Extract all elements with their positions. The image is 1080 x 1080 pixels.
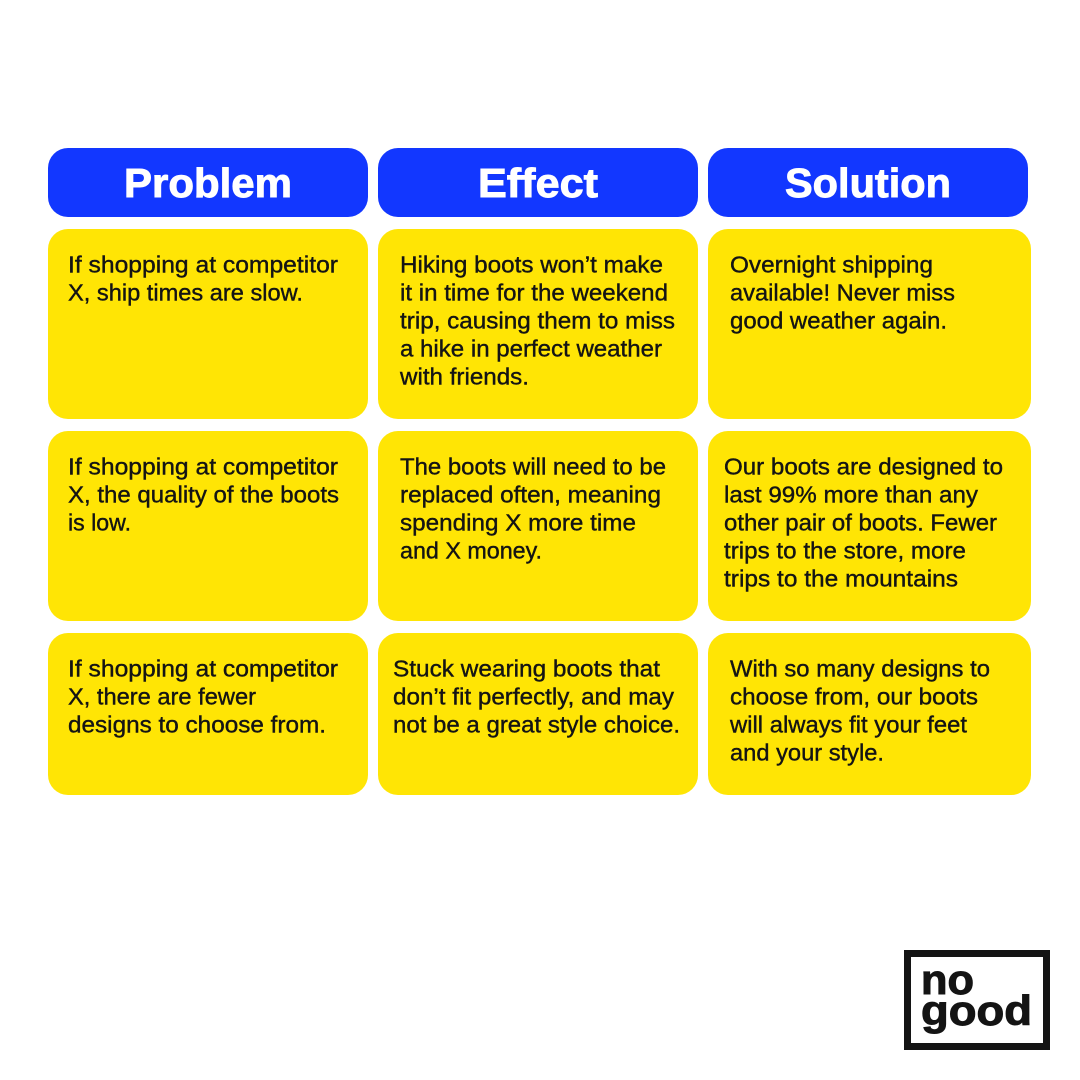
card: effect row 1	[378, 229, 698, 419]
card: solution row 3: will always fit your feet	[729, 712, 967, 738]
logo: no good: no	[921, 956, 974, 1003]
card: effect row 2	[378, 431, 698, 621]
card: solution row 2: trips to the store, more	[724, 538, 966, 564]
card: problem row 2: is low.	[68, 510, 131, 536]
card: problem row 1: If shopping at competitor	[68, 252, 338, 278]
card: effect row 1: trip, causing them to miss	[400, 308, 675, 334]
card: effect row 2: and X money.	[400, 538, 542, 564]
card: solution row 2	[708, 431, 1031, 621]
card: problem row 3: If shopping at competitor	[68, 656, 338, 682]
header: Effect: Effect	[478, 160, 598, 206]
card: effect row 1: it in time for the weekend	[400, 280, 668, 306]
header: Problem	[48, 148, 368, 217]
card: effect row 1: Hiking boots won’t make	[400, 252, 663, 278]
header: Solution: Solution	[785, 160, 951, 206]
card: solution row 1: good weather again.	[730, 308, 947, 334]
card: solution row 3: and your style.	[730, 740, 884, 766]
card: effect row 3	[378, 633, 698, 795]
card: problem row 2: If shopping at competitor	[68, 454, 338, 480]
card: solution row 1: Overnight shipping	[730, 252, 933, 278]
card: problem row 3: designs to choose from.	[68, 712, 326, 738]
card: problem row 2: X, the quality of the boots	[68, 482, 339, 508]
card: solution row 3: choose from, our boots	[730, 684, 978, 710]
card: solution row 3	[708, 633, 1031, 795]
card: solution row 2: Our boots are designed to	[724, 454, 1003, 480]
card: problem row 1: X, ship times are slow.	[68, 280, 303, 306]
card: solution row 2: trips to the mountains	[724, 566, 958, 592]
card: effect row 2: replaced often, meaning	[400, 482, 661, 508]
card: problem row 3: X, there are fewer	[68, 684, 256, 710]
card: solution row 1	[708, 229, 1031, 419]
logo: no good: good	[921, 987, 1032, 1034]
card: solution row 1: available! Never miss	[730, 280, 955, 306]
card: effect row 2: spending X more time	[400, 510, 636, 536]
logo: no good	[908, 954, 1046, 1046]
card: problem row 2	[48, 431, 368, 621]
card: problem row 1	[48, 229, 368, 419]
header: Solution	[708, 148, 1028, 217]
card: solution row 2: last 99% more than any	[724, 482, 978, 508]
card: effect row 3: not be a great style choice.	[393, 712, 680, 738]
card: effect row 3: don’t fit perfectly, and may	[393, 684, 674, 710]
card: problem row 3	[48, 633, 368, 795]
header: Effect	[378, 148, 698, 217]
card: solution row 3: With so many designs to	[730, 656, 990, 682]
card: effect row 1: a hike in perfect weather	[400, 336, 662, 362]
header: Problem: Problem	[124, 160, 292, 206]
card: effect row 1: with friends.	[399, 364, 529, 390]
card: effect row 2: The boots will need to be	[400, 454, 666, 480]
card: solution row 2: other pair of boots. Fewer	[724, 510, 997, 536]
card: effect row 3: Stuck wearing boots that	[393, 656, 660, 682]
